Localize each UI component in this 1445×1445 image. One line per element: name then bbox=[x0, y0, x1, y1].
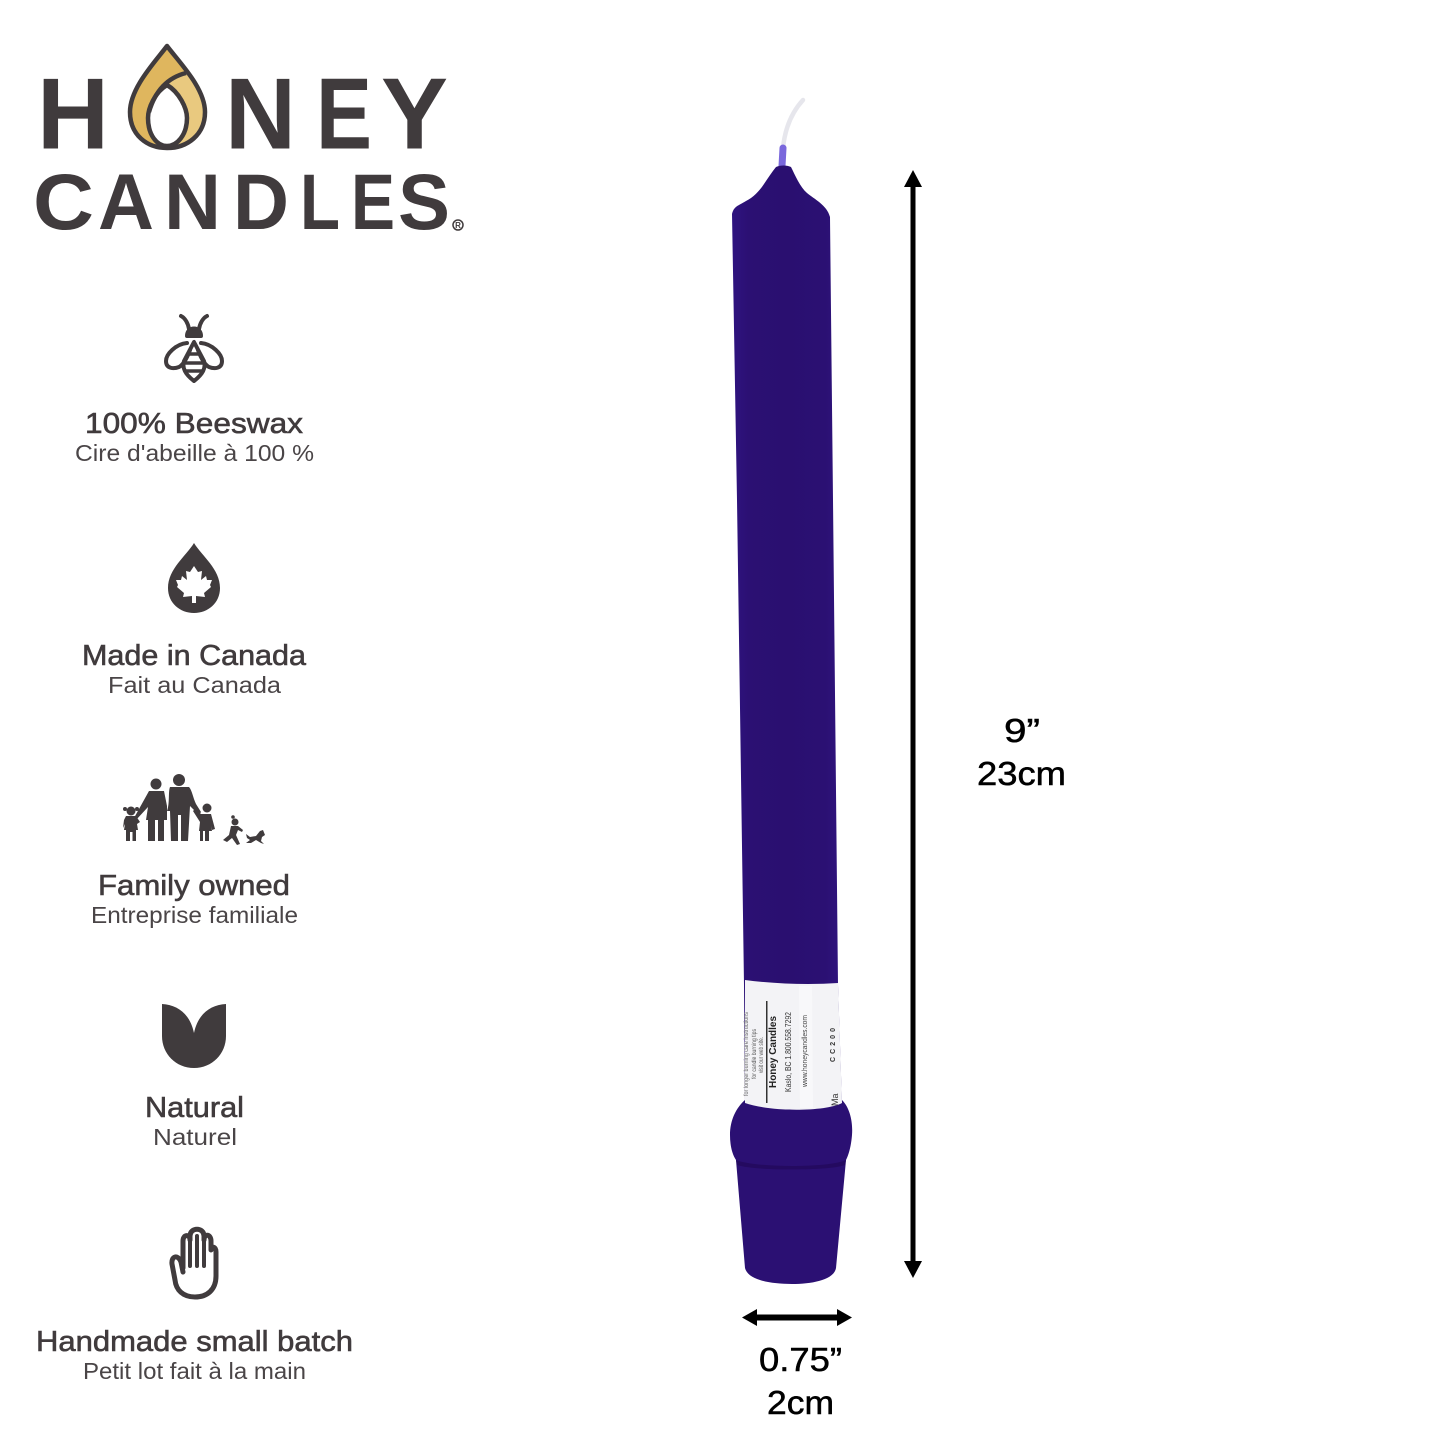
icon: hand bbox=[172, 1229, 216, 1297]
icon: leaf bbox=[162, 1004, 226, 1068]
French subtitle: Fait au Canada bbox=[108, 672, 281, 698]
logo word: CANDLES: D bbox=[233, 157, 289, 246]
dimension: width: 2cm bbox=[767, 1384, 834, 1421]
logo word: CANDLES: N bbox=[164, 157, 221, 246]
logo: Honey Candles bbox=[33, 46, 463, 246]
logo flame icon bbox=[130, 46, 205, 148]
candle label bbox=[744, 980, 842, 1110]
logo word: HONEY bbox=[37, 58, 448, 170]
logo word: CANDLES: L bbox=[300, 157, 340, 246]
dimension: width: 0.75” bbox=[759, 1341, 842, 1378]
icon: family bbox=[123, 774, 265, 845]
dimension: height: 23cm bbox=[977, 755, 1066, 792]
candle wick bbox=[782, 100, 803, 166]
product: purple beeswax candle bbox=[730, 100, 852, 1284]
candle body bbox=[732, 166, 842, 1105]
logo word: HONEY: N bbox=[225, 58, 296, 170]
logo word: HONEY: Y bbox=[381, 58, 448, 170]
heading: Natural bbox=[145, 1092, 244, 1124]
logo word: CANDLES: S bbox=[398, 157, 450, 246]
feature: Made in Canada bbox=[82, 543, 307, 698]
logo word: CANDLES bbox=[33, 157, 450, 246]
French subtitle: Naturel bbox=[153, 1124, 237, 1150]
logo word: CANDLES: A bbox=[98, 157, 154, 246]
dimension: height: 9” bbox=[1004, 712, 1040, 749]
heading: Handmade small batch bbox=[36, 1326, 353, 1358]
candle label: Kaslo, BC 1.800.558.7292 bbox=[784, 1012, 793, 1092]
heading: 100% Beeswax bbox=[85, 408, 304, 440]
candle base collar bbox=[730, 1100, 852, 1284]
candle label: Honey Candles bbox=[768, 1016, 779, 1088]
registered mark bbox=[453, 220, 463, 230]
logo word: HONEY: E bbox=[316, 58, 372, 170]
arrow: candle width bbox=[742, 1309, 852, 1326]
logo word: HONEY: H bbox=[37, 58, 109, 170]
heading: Made in Canada bbox=[82, 640, 307, 672]
candle label: CC200 bbox=[830, 1028, 837, 1062]
candle label: Ma bbox=[830, 1093, 840, 1106]
arrow: candle height bbox=[904, 170, 922, 1278]
candle label: visit our web site. bbox=[759, 1037, 765, 1073]
candle label: www.honeycandles.com bbox=[802, 1015, 809, 1088]
icon: drop with maple leaf bbox=[168, 543, 220, 613]
feature: 100% Beeswax bbox=[75, 316, 314, 466]
feature: Family owned bbox=[91, 774, 298, 928]
candle shading bbox=[736, 1160, 846, 1170]
French subtitle: Entreprise familiale bbox=[91, 902, 298, 928]
feature: Natural bbox=[145, 1004, 244, 1150]
candle label: for longer burning care instructions bbox=[744, 1012, 750, 1096]
registered mark: R bbox=[455, 221, 461, 230]
candle label: for candle burning tips bbox=[752, 1029, 758, 1079]
French subtitle: Cire d'abeille à 100 % bbox=[75, 440, 314, 466]
heading: Family owned bbox=[98, 870, 290, 902]
French subtitle: Petit lot fait à la main bbox=[83, 1358, 306, 1384]
logo word: CANDLES: E bbox=[351, 157, 395, 246]
logo word: CANDLES: C bbox=[33, 157, 94, 246]
dimension: width bbox=[759, 1341, 842, 1421]
dimension: height bbox=[977, 712, 1066, 792]
feature: Handmade small batch bbox=[36, 1229, 353, 1384]
icon: bee bbox=[166, 316, 222, 381]
